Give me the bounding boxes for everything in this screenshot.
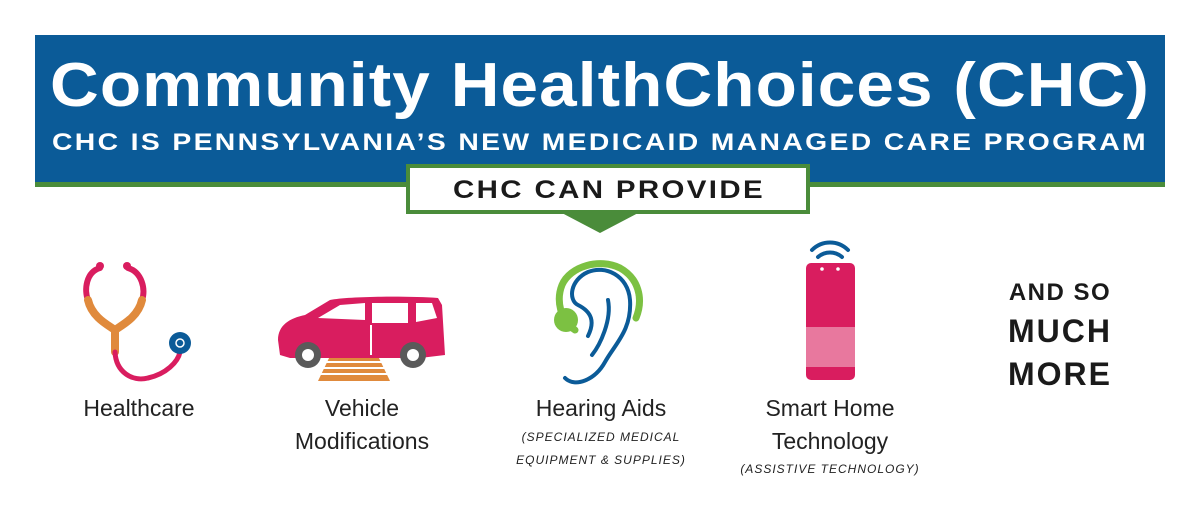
icon: stethoscope <box>86 262 191 379</box>
callout: CHC can provide: CHC CAN PROVIDE <box>453 176 765 204</box>
text: and so much more: MORE <box>1008 356 1112 392</box>
text: and so much more: MUCH <box>1008 313 1112 349</box>
label: Hearing Aids: Hearing Aids <box>536 395 666 421</box>
callout: CHC can provide <box>408 166 808 233</box>
subtitle: CHC IS PENNSYLVANIA’S NEW MEDICAID MANAGED CARE PROGRAM <box>52 129 1148 156</box>
label: Healthcare: Healthcare <box>83 395 195 421</box>
label: Smart Home Technology: Technology <box>772 428 889 454</box>
icon: ear with hearing aid <box>554 264 639 382</box>
label: Smart Home Technology: (ASSISTIVE TECHNOLOGY) <box>740 462 920 476</box>
icon: smart speaker <box>806 242 855 380</box>
icon: van <box>278 297 445 381</box>
banner <box>35 35 1165 187</box>
label: Smart Home Technology: Smart Home <box>765 395 895 421</box>
text: and so much more <box>1008 279 1112 392</box>
label: Hearing Aids: (SPECIALIZED MEDICAL <box>522 430 680 444</box>
text: and so much more: AND SO <box>1009 279 1111 306</box>
label: Vehicle Modifications: Vehicle <box>325 395 399 421</box>
label: Hearing Aids: EQUIPMENT & SUPPLIES) <box>516 453 686 467</box>
label: Vehicle Modifications: Modifications <box>295 428 429 454</box>
label: Hearing Aids <box>516 395 686 467</box>
label: Smart Home Technology <box>740 395 920 476</box>
title: Community HealthChoices (CHC) <box>50 51 1150 120</box>
